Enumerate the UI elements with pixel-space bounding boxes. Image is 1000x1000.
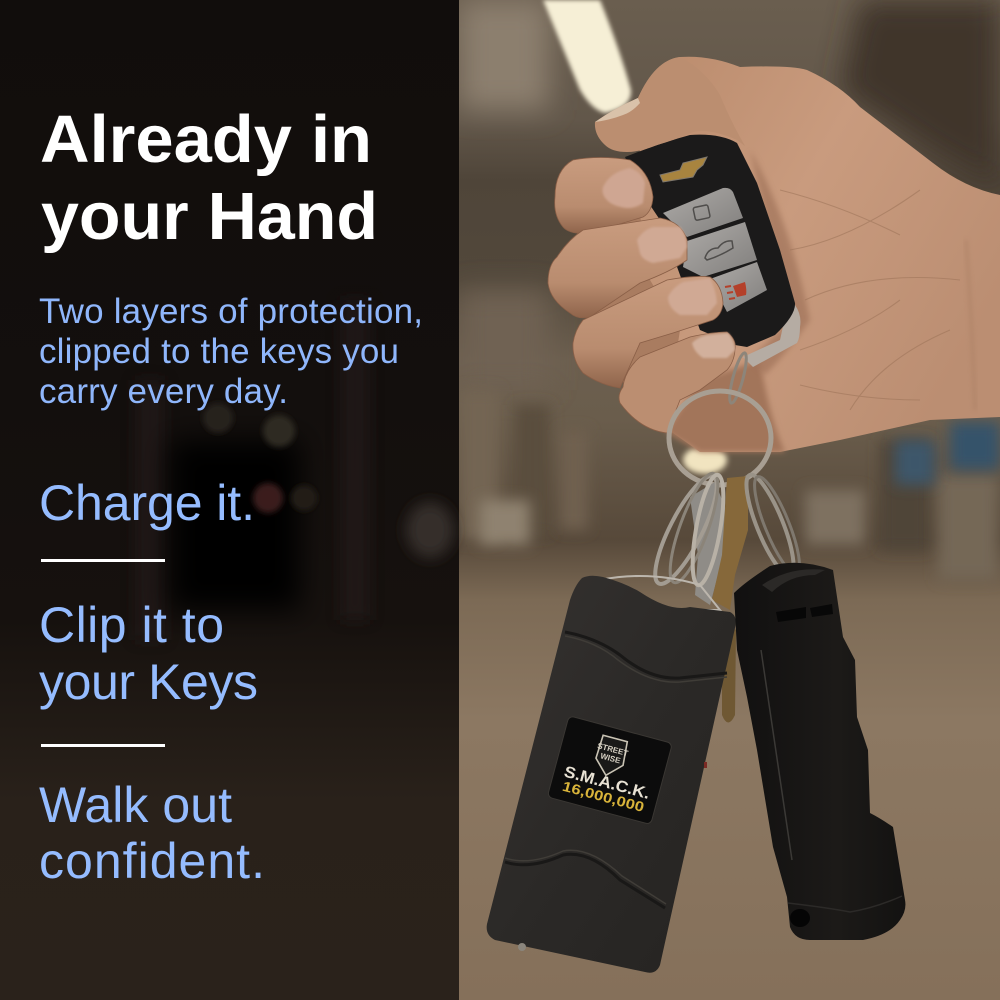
lower grip curve (505, 854, 665, 908)
pinky finger (619, 332, 735, 433)
stun gun (487, 576, 736, 973)
step 2: Clip it to (39, 597, 224, 653)
panic button (710, 262, 767, 312)
step 3: Walk out (39, 777, 232, 833)
panic icon (733, 282, 746, 297)
step 2: your Keys (39, 654, 258, 710)
middle finger (548, 218, 687, 318)
spray nozzle cap line (788, 896, 902, 912)
panel: dark text column (0, 0, 459, 1000)
hand (620, 57, 1000, 452)
upper grip curve (565, 632, 727, 678)
thumb nail (595, 98, 640, 122)
gold key (712, 476, 748, 610)
spray keyring loop (762, 569, 825, 592)
index finger (555, 158, 653, 233)
palm creases (780, 190, 960, 410)
car icon (705, 241, 733, 260)
fob body (625, 135, 795, 347)
key blade below (722, 620, 736, 722)
skin between curled fingers (580, 215, 680, 395)
key fob (625, 135, 800, 367)
product badge (547, 716, 672, 825)
small connecting ring (726, 352, 750, 404)
heading: your Hand (41, 179, 378, 254)
heading (40, 102, 378, 254)
palm shadow beside fob (750, 150, 810, 375)
key rings and keys (645, 352, 808, 722)
spray clip band (776, 607, 806, 622)
lock button (663, 188, 743, 237)
ceiling light streak (543, 0, 631, 113)
badge brand text: STREET (596, 741, 629, 758)
wrist crease (966, 240, 975, 410)
fob chrome (743, 305, 800, 367)
stun gun body (487, 576, 736, 973)
thumb (595, 57, 745, 152)
bottom contacts (518, 943, 526, 951)
palm and wrist (620, 57, 1000, 452)
spray side slot (761, 650, 792, 860)
heading: Already in (40, 102, 372, 177)
lower palm shading (665, 360, 785, 452)
nail (637, 227, 687, 263)
pepper spray (734, 563, 905, 940)
stun gun prongs (600, 576, 720, 610)
chevrolet badge (660, 157, 707, 182)
badge product name: S.M.A.C.K. (562, 764, 652, 803)
trunk button (683, 222, 757, 277)
nail (668, 278, 717, 315)
step 1: Charge it. (39, 475, 255, 531)
photo background: blurred parking garage (459, 0, 1000, 1000)
main ring (669, 391, 771, 485)
ring finger (573, 276, 723, 388)
intro text (39, 292, 423, 411)
spray body (734, 563, 905, 940)
product badge: WISE (599, 751, 622, 766)
badge voltage: 16,000,000 (561, 778, 646, 815)
side switch (704, 762, 707, 768)
shield logo (592, 735, 629, 779)
small rings (645, 469, 727, 591)
nail (602, 168, 645, 208)
step 3: confident. (39, 833, 265, 889)
step 3 (39, 777, 265, 889)
intro text: clipped to the keys you (39, 332, 399, 371)
intro text: Two layers of protection, (39, 292, 423, 331)
spray cap opening (790, 909, 810, 927)
step 2 (39, 597, 258, 710)
nail (692, 333, 735, 358)
lock icon (693, 205, 710, 221)
silver key (690, 482, 730, 605)
panic bars (725, 286, 735, 299)
intro text: carry every day. (39, 372, 288, 411)
